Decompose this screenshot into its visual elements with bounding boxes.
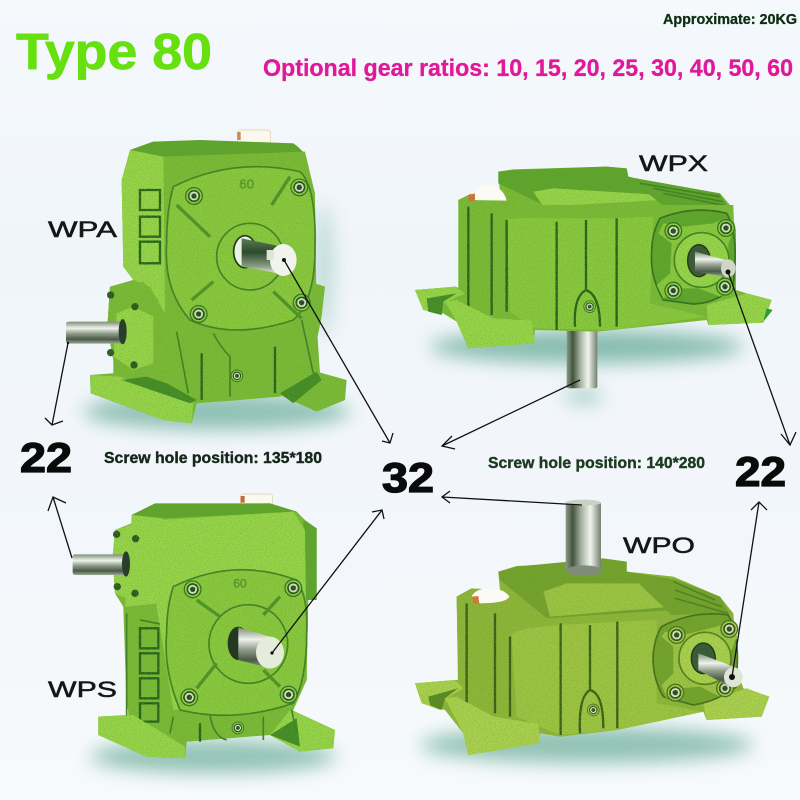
input shaft <box>66 319 127 344</box>
oil plug <box>472 588 509 604</box>
output shaft <box>566 500 602 576</box>
product: WPX gearbox <box>415 167 773 403</box>
model label WPS: WPS <box>48 677 117 702</box>
gearbox casting <box>98 503 335 758</box>
input shaft <box>73 551 130 577</box>
product: WPO gearbox <box>415 500 769 763</box>
product: WPA gearbox <box>66 130 350 430</box>
output shaft <box>234 236 297 276</box>
casting mark: 60 <box>239 177 254 192</box>
oil plug <box>241 494 273 505</box>
arrow: WPO output shaft to 32 <box>442 491 582 505</box>
arrow: WPX output shaft to 32 <box>442 380 580 449</box>
screw hole note right: Screw hole position: 140*280 <box>488 455 705 472</box>
gearbox casting <box>415 167 773 348</box>
input shaft <box>688 245 736 277</box>
gearbox casting <box>90 140 347 423</box>
arrow: WPA output shaft to 32 <box>282 258 393 443</box>
arrow: WPX input shaft to 22 <box>726 270 796 445</box>
gear ratios heading: Optional gear ratios: 10, 15, 20, 25, 30, 40, 50, 60 <box>263 55 793 82</box>
arrow: WPS output shaft to 32 <box>270 510 384 655</box>
dimension 32 centre: 32 <box>382 454 434 501</box>
screw hole note left: Screw hole position: 135*180 <box>104 450 322 467</box>
oil plug <box>237 130 271 143</box>
model label WPO: WPO <box>623 533 695 558</box>
title: Type 80 <box>16 23 212 80</box>
dimension 22 left: 22 <box>20 434 72 481</box>
arrow: WPS input shaft to 22 <box>48 497 72 558</box>
model label WPX: WPX <box>639 151 708 176</box>
casting mark: 60 <box>233 576 247 590</box>
gearbox casting <box>415 558 769 755</box>
arrow: WPO input shaft to 22 <box>729 502 767 680</box>
input shaft <box>691 643 743 687</box>
product: WPS gearbox <box>73 494 337 773</box>
weight note: Approximate: 20KG <box>663 12 797 28</box>
output shaft <box>228 627 284 669</box>
output shaft <box>567 330 597 388</box>
dimension 22 right: 22 <box>735 448 786 495</box>
arrow: WPA input shaft to 22 <box>45 342 69 425</box>
model label WPA: WPA <box>48 217 117 242</box>
oil plug <box>468 184 507 201</box>
